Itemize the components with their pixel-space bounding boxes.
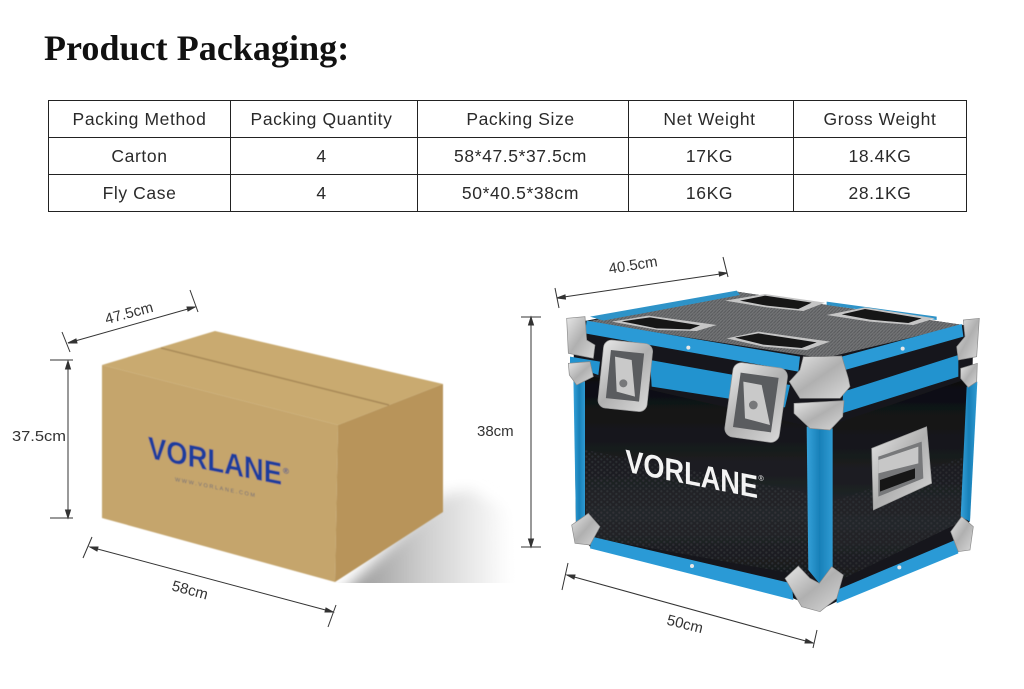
case latches xyxy=(597,339,789,443)
case corner brackets xyxy=(567,317,979,612)
product illustrations xyxy=(12,256,980,648)
dimension: carton height xyxy=(12,360,73,518)
packing table: Fly Case xyxy=(103,182,176,202)
fly case xyxy=(567,291,979,612)
dimension: carton length xyxy=(83,537,336,627)
case blue frame xyxy=(570,321,977,603)
packing table: 16KG xyxy=(686,182,733,202)
packing table xyxy=(48,100,967,212)
dimension: carton height: 37.5cm xyxy=(12,428,66,445)
dimension: carton length: 58cm xyxy=(170,578,210,603)
carton box xyxy=(102,331,443,582)
dimension: case length xyxy=(562,563,817,648)
packing table: 17KG xyxy=(686,146,733,166)
dimension: carton width: 47.5cm xyxy=(103,299,155,328)
case faces xyxy=(580,373,968,587)
case rivets xyxy=(686,346,905,569)
carton shadow xyxy=(340,488,496,583)
carton logo: WWW.VORLANE.COM xyxy=(175,477,255,499)
case side handle xyxy=(872,427,932,510)
packing table: 50*40.5*38cm xyxy=(462,182,579,202)
packing table: 4 xyxy=(316,146,327,166)
packing table: Packing Quantity xyxy=(251,108,392,128)
dimension: carton width xyxy=(62,290,198,352)
case silhouette xyxy=(573,292,973,610)
dimension: case height xyxy=(477,317,541,547)
packing table: 4 xyxy=(316,182,327,202)
packing table: Gross Weight xyxy=(824,108,936,128)
packing table: 58*47.5*37.5cm xyxy=(454,146,587,166)
title: Product Packaging: xyxy=(44,28,349,68)
dimension: case length: 50cm xyxy=(665,612,705,637)
dimension: case height: 38cm xyxy=(477,423,514,440)
packing table: 28.1KG xyxy=(849,182,911,202)
case logo: ® xyxy=(758,473,764,483)
case logo: VORLANE xyxy=(625,443,758,505)
dimension: case width: 40.5cm xyxy=(607,253,659,278)
packing table: 18.4KG xyxy=(849,146,911,166)
packing table: Packing Size xyxy=(466,108,575,128)
carton logo: ® xyxy=(283,466,289,476)
carton logo: VORLANE xyxy=(148,430,282,492)
packing table: Packing Method xyxy=(73,108,206,128)
case lid top xyxy=(587,291,963,358)
dimension: case width xyxy=(555,253,728,308)
packing table: Net Weight xyxy=(663,108,756,128)
packing table: Carton xyxy=(111,146,168,166)
